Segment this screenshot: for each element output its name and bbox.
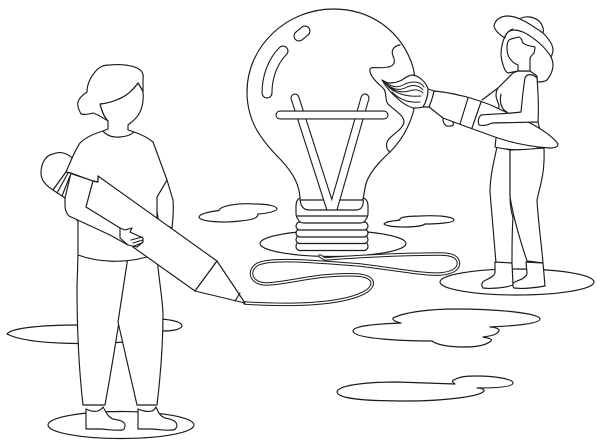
- right boot: [513, 262, 545, 288]
- hat brim: [494, 16, 553, 57]
- collar: [296, 198, 368, 223]
- brush band: [460, 98, 481, 128]
- woman with pencil: [41, 65, 245, 430]
- hair left: [501, 29, 518, 73]
- ground ellipse: left woman: [48, 412, 194, 438]
- woman with paintbrush: [382, 16, 558, 288]
- upper arm front shoulder line: [482, 88, 498, 100]
- right arm behind: [157, 180, 173, 228]
- eraser end of pencil: [41, 153, 73, 190]
- arm holding pencil: [65, 173, 135, 245]
- hair: [78, 65, 143, 121]
- bulb glass: [247, 9, 416, 200]
- screw base: [296, 198, 368, 250]
- light bulb: [247, 9, 416, 250]
- right shoe: [138, 407, 177, 430]
- hat crown: [521, 17, 543, 33]
- highlight dot: [299, 31, 305, 36]
- wire connecting pencil to bulb: [245, 254, 458, 304]
- legs: [77, 250, 163, 405]
- ferrule of pencil: [53, 172, 71, 198]
- bristles: [382, 75, 428, 108]
- pencil body: [86, 176, 217, 291]
- paint splash: [370, 45, 404, 152]
- hair right: [538, 57, 553, 82]
- ground ellipse: right woman: [440, 269, 594, 295]
- highlight stroke: [267, 51, 283, 93]
- left boot: [482, 262, 513, 288]
- paintbrush: [382, 75, 558, 148]
- face and neck: [507, 37, 535, 71]
- shirt: [66, 131, 167, 261]
- hand and fingers: [120, 228, 143, 247]
- pencil tip: [195, 261, 245, 303]
- clouds and ground puddles: [7, 204, 540, 401]
- torso and shirt: [495, 71, 544, 150]
- legs: [490, 147, 544, 263]
- bristle strands: [384, 81, 424, 102]
- pencil lead: [235, 293, 240, 301]
- forearm and hand: [478, 75, 538, 125]
- brush handle: [429, 91, 558, 148]
- ferrule: [423, 89, 434, 107]
- ground ellipse: bulb: [260, 230, 406, 256]
- filament: [280, 98, 384, 213]
- left shoe: [86, 407, 125, 430]
- neck and face: [100, 83, 143, 137]
- sleeve edge: [66, 172, 98, 182]
- thumb under brush: [443, 119, 453, 126]
